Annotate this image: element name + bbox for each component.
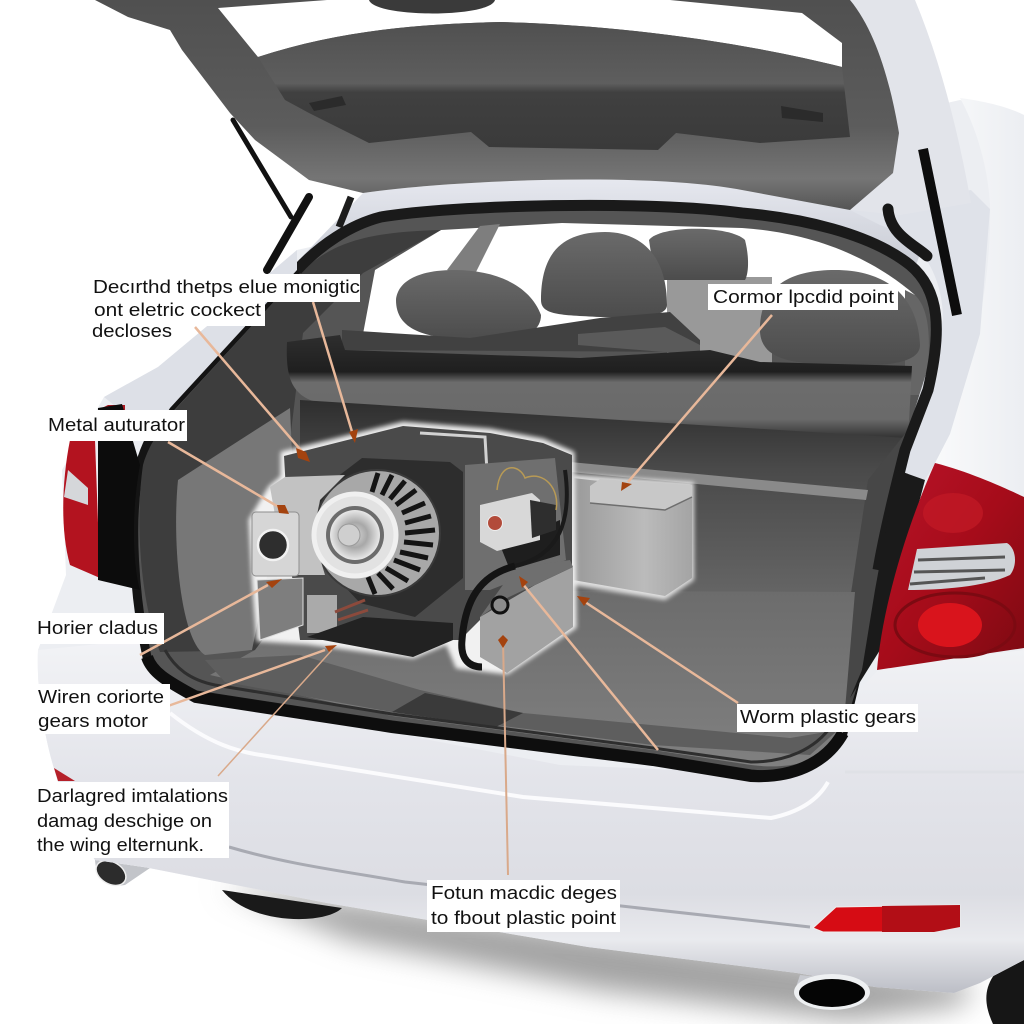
round lamp — [918, 603, 982, 647]
left exhaust — [92, 855, 150, 891]
inner ring dark — [326, 506, 384, 564]
pointer: darlagred — [218, 650, 332, 776]
label: worm plastic gears: Worm plastic gears — [740, 706, 916, 727]
motor glow outline — [250, 423, 575, 673]
label: decloses: Decırthd thetps elue monigtic — [93, 276, 360, 297]
pointer: fotun — [498, 635, 508, 875]
label: wiren coriorte: gears motor — [38, 710, 148, 731]
wall ledge — [570, 462, 868, 500]
tailgate — [95, 0, 899, 210]
label: cormor point: Cormor lpcdid point — [713, 286, 894, 307]
reflector right half — [882, 905, 960, 932]
left interior trim — [139, 230, 441, 652]
upper door seal — [297, 205, 936, 570]
motor front flange — [314, 494, 396, 576]
right plate — [465, 458, 566, 590]
headrest 2 — [541, 232, 667, 317]
pointer: metal auturator — [168, 442, 289, 514]
right hinge arm — [888, 209, 927, 256]
label: darlagred: the wing elternunk. — [37, 834, 204, 855]
label: wiren coriorte — [37, 684, 170, 734]
bumper upper crease — [170, 713, 828, 818]
pointer: cormor point — [621, 315, 772, 491]
left trim panel — [176, 408, 292, 655]
bumper right crease — [845, 770, 1024, 774]
sill grey line — [165, 650, 832, 762]
seat base — [342, 312, 700, 352]
floor tray — [392, 693, 523, 727]
top of lower box — [480, 560, 573, 617]
clear reverse lens — [908, 543, 1015, 590]
right handle slot — [781, 106, 823, 122]
pointer: worm gears — [577, 596, 738, 703]
box glow — [573, 474, 694, 600]
headrest 4 — [760, 270, 920, 366]
label: fotun: to fbout plastic point — [431, 907, 616, 928]
rubber sill seal — [147, 657, 843, 776]
left gas strut — [233, 120, 309, 270]
module dark side — [530, 500, 556, 538]
tailgate shell — [850, 0, 971, 215]
plate hole — [258, 530, 288, 560]
bumper lower crease — [229, 847, 810, 927]
fins — [368, 473, 435, 594]
top black latch — [369, 0, 495, 14]
small latch strut — [339, 197, 351, 227]
label: metal auturator — [44, 410, 187, 441]
finned rotor — [314, 470, 440, 596]
chrome fitting — [307, 595, 337, 633]
right exhaust — [794, 974, 870, 1010]
label: cormor point — [708, 284, 898, 310]
motor assembly — [250, 423, 575, 673]
pointer: horier cladus — [140, 579, 282, 655]
left tyre — [222, 890, 342, 919]
rear reflector — [813, 905, 960, 932]
label: decloses: ont eletric cockect — [94, 299, 261, 320]
label: fotun: Fotun macdic deges — [431, 882, 617, 903]
pointer: floor — [519, 576, 658, 750]
rear cargo wall — [300, 400, 908, 600]
pointer: wiren coriorte — [168, 645, 337, 706]
white upper rim — [297, 180, 925, 270]
right gas strut — [923, 149, 957, 315]
silver box — [573, 474, 694, 600]
headrest 3 — [649, 229, 748, 280]
motor housing back — [284, 426, 572, 640]
parcel shelf cushion — [578, 327, 700, 355]
right side trim — [843, 420, 925, 733]
headrest 1 — [396, 270, 541, 340]
trunk opening — [134, 205, 936, 775]
upper lens — [923, 493, 983, 533]
label: darlagred — [33, 782, 229, 858]
rear bumper — [38, 640, 1024, 993]
ground shadow — [220, 885, 975, 1020]
interior right panel — [667, 277, 772, 367]
rear window view — [360, 223, 915, 350]
inner dark panel — [258, 22, 850, 150]
pointer: monigtic — [313, 302, 358, 443]
label: horier cladus — [37, 613, 164, 644]
right quarter panel — [935, 98, 1024, 505]
white module — [480, 493, 540, 551]
label: horier cladus: Horier cladus — [37, 617, 158, 638]
cargo cover roll — [287, 335, 912, 440]
tailgate inner frame — [95, 0, 899, 210]
floor front band — [205, 655, 838, 755]
red dial — [488, 516, 502, 530]
window opening — [218, 0, 842, 67]
flange edge — [314, 494, 396, 576]
center hub — [338, 524, 360, 546]
cable gland — [492, 597, 508, 613]
red wires — [335, 600, 368, 620]
left body pillar — [104, 250, 297, 440]
box front — [573, 478, 692, 596]
trunk floor — [210, 590, 855, 766]
bottom black plate — [307, 617, 453, 657]
right window trim — [905, 290, 929, 395]
module dark wiring — [500, 520, 560, 570]
right tyre — [986, 950, 1024, 1024]
right side cable — [515, 470, 567, 566]
pointer: decloses — [195, 327, 310, 462]
black motor housing — [320, 458, 463, 617]
lower left metal panel — [257, 578, 303, 640]
left pillar view — [447, 224, 500, 280]
cylinder body — [270, 475, 345, 575]
left tail light — [63, 404, 140, 590]
box lid — [590, 479, 692, 510]
label: metal auturator: Metal auturator — [48, 414, 185, 435]
label: wiren coriorte: Wiren coriorte — [38, 686, 164, 707]
label: decloses: decloses — [92, 320, 172, 341]
front plate — [252, 512, 299, 576]
label: fotun — [427, 880, 620, 932]
inner ring light — [330, 510, 380, 560]
label: decloses — [90, 274, 360, 344]
small left reflector — [54, 768, 75, 781]
black cables — [462, 566, 515, 667]
lower grey box — [480, 567, 573, 673]
gold wires — [497, 468, 557, 510]
left handle slot — [309, 96, 346, 111]
right tail light — [877, 463, 1024, 670]
label: darlagred: Darlagred imtalations — [37, 785, 228, 806]
label: worm plastic gears — [737, 704, 918, 732]
top handle bar — [420, 433, 487, 472]
label: darlagred: damag deschige on — [37, 810, 212, 831]
right body pillar — [850, 190, 990, 480]
black pillar right — [850, 470, 925, 698]
